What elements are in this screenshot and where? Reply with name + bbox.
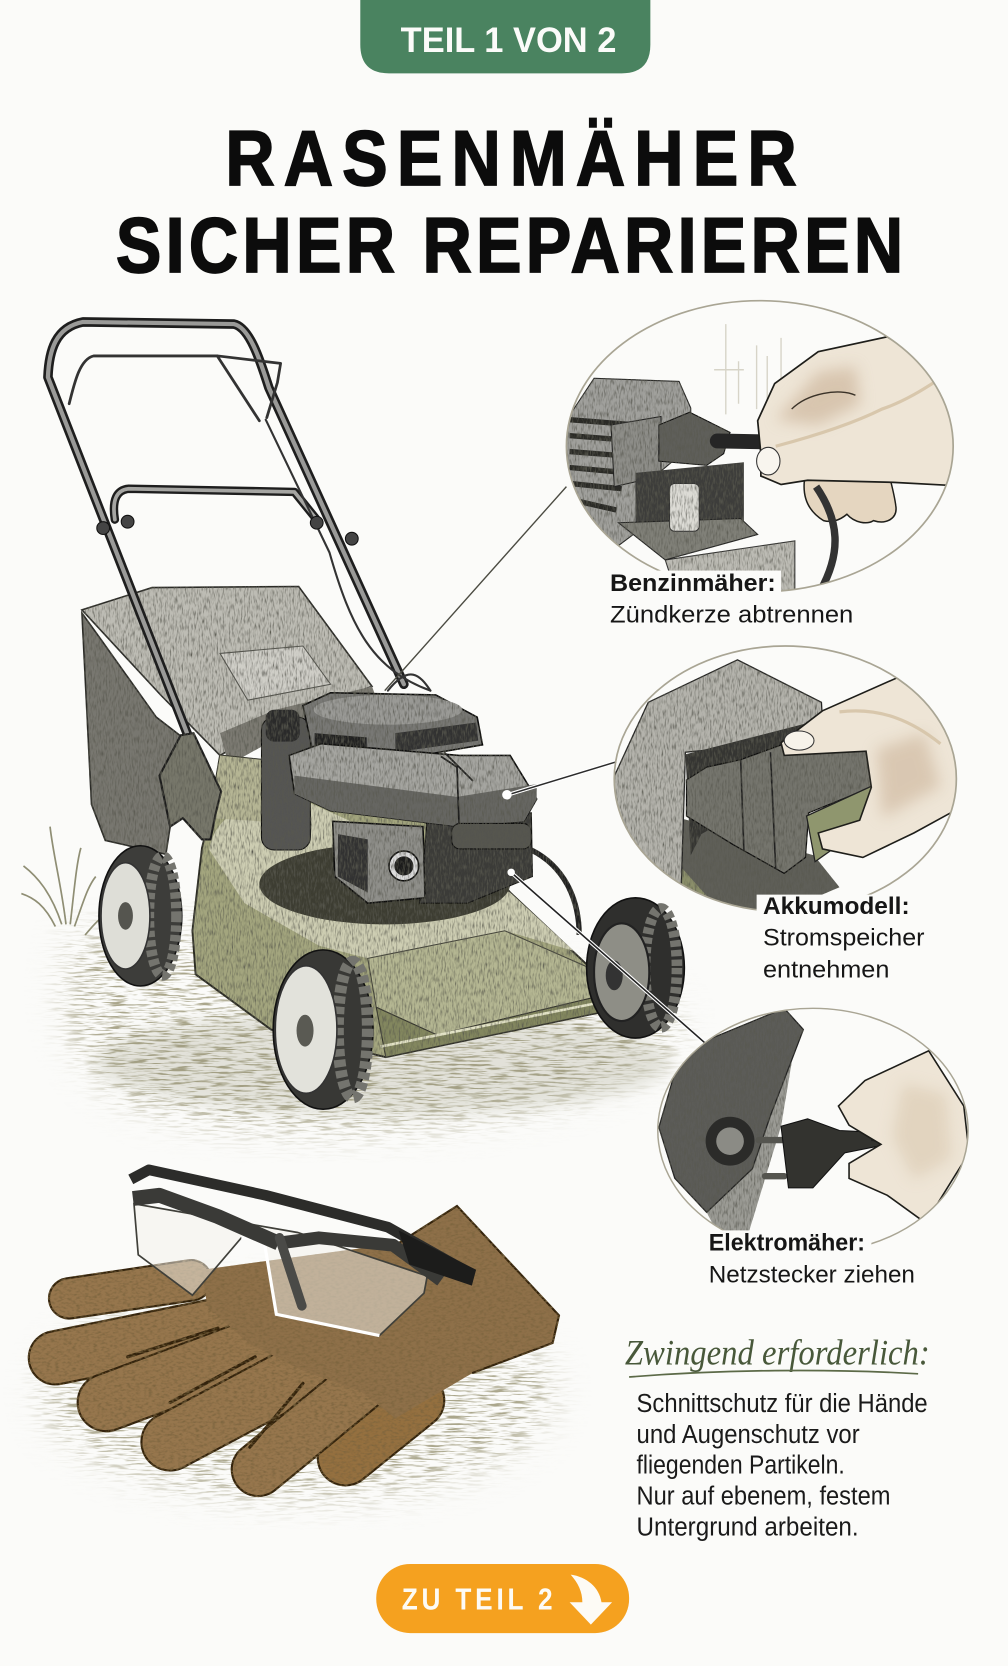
title: RASENMÄHER xyxy=(225,116,797,202)
callout line: spark plug xyxy=(385,487,566,691)
text block: requirements: Schnittschutz für die Hände xyxy=(637,1390,928,1418)
inset: spark plug xyxy=(563,301,958,606)
hand xyxy=(758,337,958,523)
label: mains plug: Elektromäher: xyxy=(709,1230,865,1257)
label: spark plug xyxy=(610,570,853,629)
button: next part: ZU TEIL 2 xyxy=(402,1583,553,1617)
text block: requirements: und Augenschutz vor xyxy=(637,1421,860,1449)
label: battery: Stromspeicher xyxy=(763,925,924,952)
tab: part indicator: TEIL 1 VON 2 xyxy=(401,21,616,60)
label: mains plug xyxy=(709,1230,915,1288)
battery housing xyxy=(611,660,871,919)
heading: mandatory: Zwingend erforderlich: xyxy=(625,1332,930,1372)
label: mains plug: Netzstecker ziehen xyxy=(709,1261,915,1288)
inset: mains plug xyxy=(658,1008,969,1258)
grass under gloves xyxy=(43,1286,553,1498)
battery handle xyxy=(807,786,873,862)
hand xyxy=(781,678,965,857)
illustration: lawn mower xyxy=(21,322,684,1131)
deck xyxy=(192,755,599,1057)
icon: curved arrow xyxy=(570,1575,612,1625)
label: battery: entnehmen xyxy=(763,956,889,983)
illustration: gloves and safety glasses xyxy=(43,1170,559,1498)
text block: requirements: Nur auf ebenem, festem xyxy=(637,1482,890,1510)
label: battery xyxy=(763,893,924,984)
rear left wheel xyxy=(99,846,182,986)
inset: battery xyxy=(611,646,965,922)
grass catcher xyxy=(82,586,377,854)
cable xyxy=(816,487,835,591)
plug xyxy=(756,1118,880,1188)
grass shadow xyxy=(96,1009,669,1116)
title: SICHER REPARIEREN xyxy=(116,203,903,289)
handle xyxy=(48,322,430,771)
plug wire xyxy=(717,441,770,442)
label: spark plug: Benzinmäher: xyxy=(610,570,776,597)
engine xyxy=(259,693,579,935)
handle bolts xyxy=(97,515,358,545)
callout line: mains plug xyxy=(507,869,707,1044)
handle bracket xyxy=(159,733,221,839)
text block: requirements: Untergrund arbeiten. xyxy=(637,1513,859,1541)
button: next part xyxy=(376,1564,629,1633)
glasses xyxy=(131,1170,476,1336)
hand xyxy=(838,1051,969,1223)
gloves xyxy=(55,1206,559,1469)
label: spark plug: Zündkerze abtrennen xyxy=(610,602,853,629)
socket housing xyxy=(659,1008,803,1248)
title xyxy=(116,116,903,289)
text block: requirements xyxy=(637,1390,928,1541)
text block: requirements: fliegenden Partikeln. xyxy=(637,1452,845,1480)
rear right wheel xyxy=(587,898,684,1038)
grass tuft xyxy=(21,827,111,935)
grass under mower xyxy=(64,924,678,1131)
label: battery: Akkumodell: xyxy=(763,893,910,920)
front wheel xyxy=(273,950,373,1109)
tab: part indicator xyxy=(360,0,650,73)
engine housing xyxy=(563,378,795,606)
callout line: battery xyxy=(502,762,616,800)
